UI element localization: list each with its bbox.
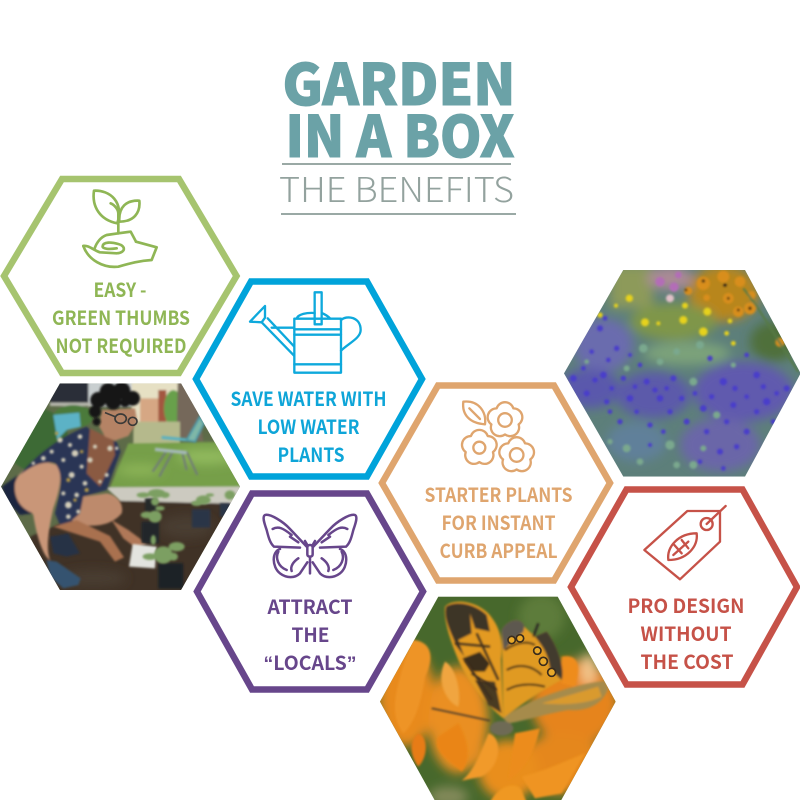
label: attract: “LOCALS” xyxy=(264,647,356,676)
icon: watering can xyxy=(250,292,361,373)
curly hair xyxy=(89,382,140,426)
title block xyxy=(279,40,516,215)
label: easy: GREEN THUMBS xyxy=(52,302,190,331)
chair xyxy=(153,417,204,477)
label: save water xyxy=(230,383,386,468)
wings xyxy=(445,602,503,718)
panel: starter plants xyxy=(382,386,610,580)
subtitle: The Benefits with rules: THE BENEFITS xyxy=(279,163,514,212)
photo: gardener planting xyxy=(0,380,243,593)
label: pro design: THE COST xyxy=(640,646,734,675)
title: Garden in a Box xyxy=(282,40,516,174)
person xyxy=(2,408,147,588)
label: starter plants: CURB APPEAL xyxy=(440,535,558,564)
label: pro design: PRO DESIGN xyxy=(628,590,744,619)
glasses xyxy=(105,413,137,425)
title: Garden in a Box: GARDEN xyxy=(282,40,516,122)
label: attract xyxy=(264,591,356,676)
panel: save water xyxy=(196,282,422,476)
icon: flowers and leaf xyxy=(462,402,534,471)
label: easy: EASY - xyxy=(94,274,146,303)
photo: purple and yellow flower bed xyxy=(560,265,800,482)
label: easy xyxy=(52,274,190,359)
panel: easy, green thumbs not required xyxy=(4,179,236,373)
shirt pattern xyxy=(32,434,118,519)
label: pro design: WITHOUT xyxy=(640,618,732,647)
forewing veins xyxy=(455,633,498,700)
wing spots xyxy=(508,635,556,676)
label: attract: THE xyxy=(292,619,330,648)
label: attract: ATTRACT xyxy=(267,591,352,620)
plants and pots xyxy=(129,498,230,589)
icon: butterfly xyxy=(264,515,356,577)
label: save water: SAVE WATER WITH xyxy=(230,383,386,412)
label: save water: PLANTS xyxy=(278,439,344,468)
title: Garden in a Box: IN A BOX xyxy=(286,92,514,174)
label: save water: LOW WATER xyxy=(258,411,360,440)
label: pro design xyxy=(628,590,744,675)
label: starter plants xyxy=(424,479,572,564)
panel: attract the locals xyxy=(197,494,423,690)
photo: butterfly on orange milkweed xyxy=(375,590,622,800)
icon: price tag with leaf xyxy=(644,506,726,579)
icon: seedling in hand xyxy=(83,191,157,267)
label: starter plants: FOR INSTANT xyxy=(442,507,556,536)
panel: pro design xyxy=(571,490,797,684)
label: easy: NOT REQUIRED xyxy=(56,330,186,359)
label: starter plants: STARTER PLANTS xyxy=(424,479,572,508)
